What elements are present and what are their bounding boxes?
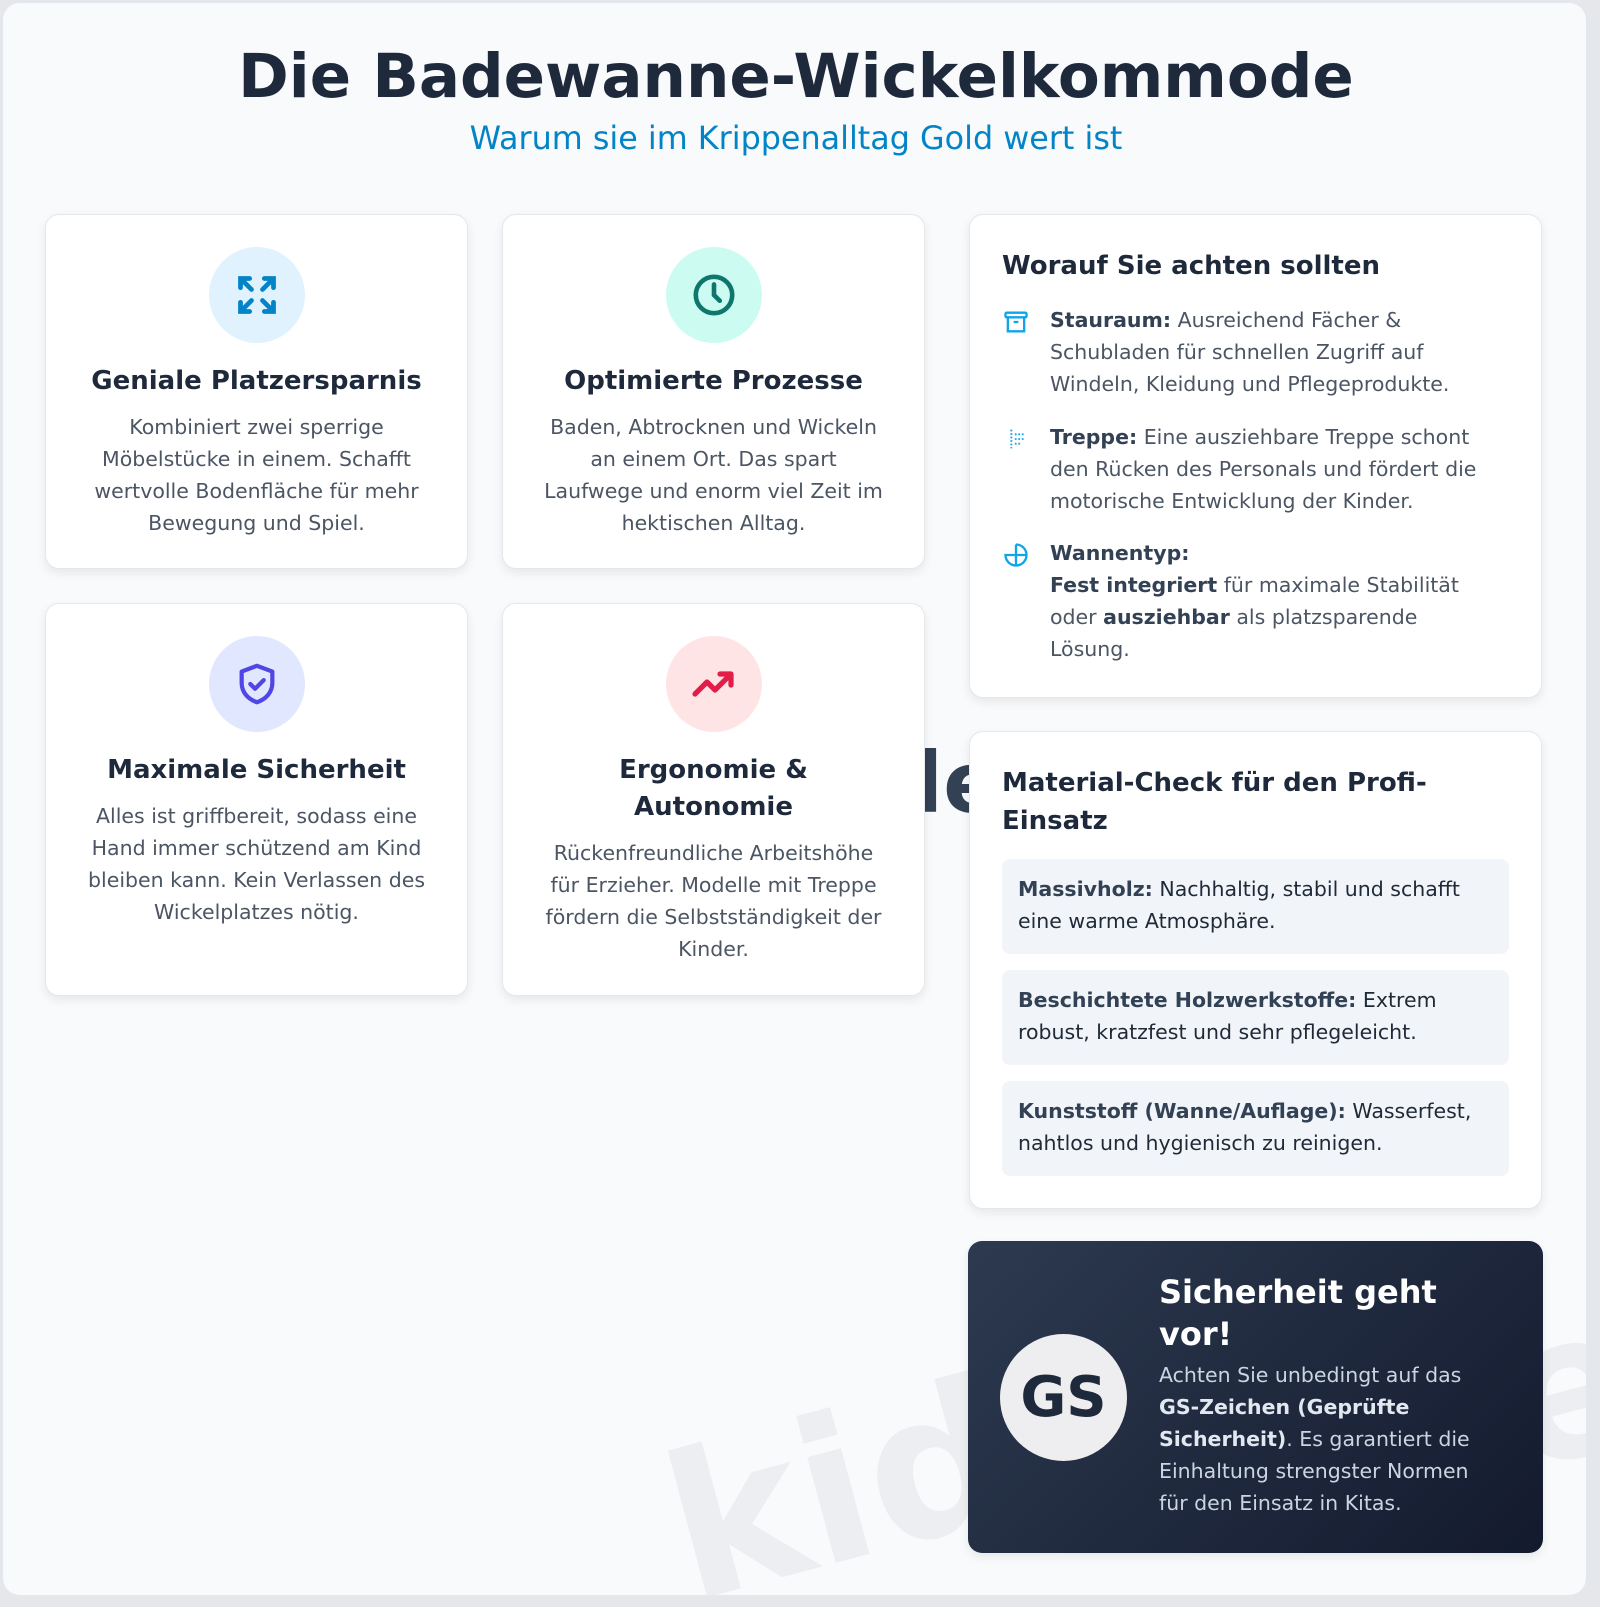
- icon: expand arrows: [208, 247, 304, 343]
- watermark: de: [883, 734, 1000, 832]
- heading: Sicherheit geht vor!: [1159, 1273, 1437, 1353]
- title: Die Badewanne-Wickelkommode: [238, 41, 1354, 112]
- icon: clock: [666, 247, 762, 343]
- heading: Worauf Sie achten sollten: [1002, 251, 1380, 281]
- item: Wannentyp: Wannentyp:: [1050, 541, 1189, 565]
- item: Wannentyp: Fest integriert für maximale Stabilität oder ausziehbar als platzsparende Lösung.: [1050, 573, 1459, 661]
- text: Achten Sie unbedingt auf das GS-Zeichen (Geprüfte Sicherheit). Es garantiert die Einhaltung strengster Normen für den Einsatz in Kitas.: [1159, 1363, 1470, 1515]
- material: Holzwerkstoffe: Beschichtete Holzwerkstoffe: Extrem robust, kratzfest und sehr pflegeleicht.: [1018, 988, 1437, 1044]
- heading: Geniale Platzersparnis: [91, 366, 422, 396]
- text: Rückenfreundliche Arbeitshöhe für Erzieher. Modelle mit Treppe fördern die Selbstständigkeit der Kinder.: [546, 841, 881, 961]
- icon: shield: [208, 636, 304, 732]
- panel: Material-Check: [969, 731, 1542, 1209]
- heading: Ergonomie &: [619, 755, 808, 785]
- material: Kunststoff: Kunststoff (Wanne/Auflage): Wasserfest, nahtlos und hygienisch zu reinigen.: [1018, 1099, 1471, 1155]
- subtitle: Warum sie im Krippenalltag Gold wert ist: [470, 120, 1122, 157]
- icon: GS badge: [1000, 1334, 1127, 1461]
- panel: Sicherheit: [45, 603, 468, 996]
- panel: Prozesse: [502, 214, 925, 569]
- item: Stauraum: Stauraum: Ausreichend Fächer & Schubladen für schnellen Zugriff auf Windeln, Kleidung und Pflegeprodukte.: [1050, 308, 1449, 396]
- heading: Optimierte Prozesse: [564, 366, 863, 396]
- panel: Worauf achten: [969, 214, 1542, 698]
- heading: Maximale Sicherheit: [107, 755, 406, 785]
- panel: Platzersparnis: [45, 214, 468, 569]
- heading: Material-Check für den Profi-Einsatz: [1002, 768, 1427, 836]
- item: Wannentyp: [1004, 541, 1459, 661]
- material: Massivholz: [1002, 859, 1509, 954]
- item: Treppe: Treppe: Eine ausziehbare Treppe schont den Rücken des Personals und fördert die motorische Entwicklung der Kinder.: [1050, 425, 1476, 513]
- text: Kombiniert zwei sperrige Möbelstücke in einem. Schafft wertvolle Bodenfläche für mehr Bewegung und Spiel.: [94, 415, 419, 535]
- text: Baden, Abtrocknen und Wickeln an einem Ort. Das spart Laufwege und enorm viel Zeit im hektischen Alltag.: [544, 415, 883, 535]
- icon: GS badge: GS: [1020, 1365, 1107, 1430]
- material: Massivholz: Massivholz: Nachhaltig, stabil und schafft eine warme Atmosphäre.: [1018, 877, 1460, 933]
- material: Kunststoff: [1002, 1081, 1509, 1176]
- heading: Autonomie: [634, 792, 793, 822]
- text: Alles ist griffbereit, sodass eine Hand immer schützend am Kind bleiben kann. Kein Verlassen des Wickelplatzes nötig.: [88, 804, 425, 924]
- panel: GS callout: [968, 1241, 1543, 1553]
- material: Holzwerkstoffe: [1002, 970, 1509, 1065]
- panel: Ergonomie: [502, 603, 925, 996]
- icon: trend: [666, 636, 762, 732]
- heading: [619, 755, 808, 822]
